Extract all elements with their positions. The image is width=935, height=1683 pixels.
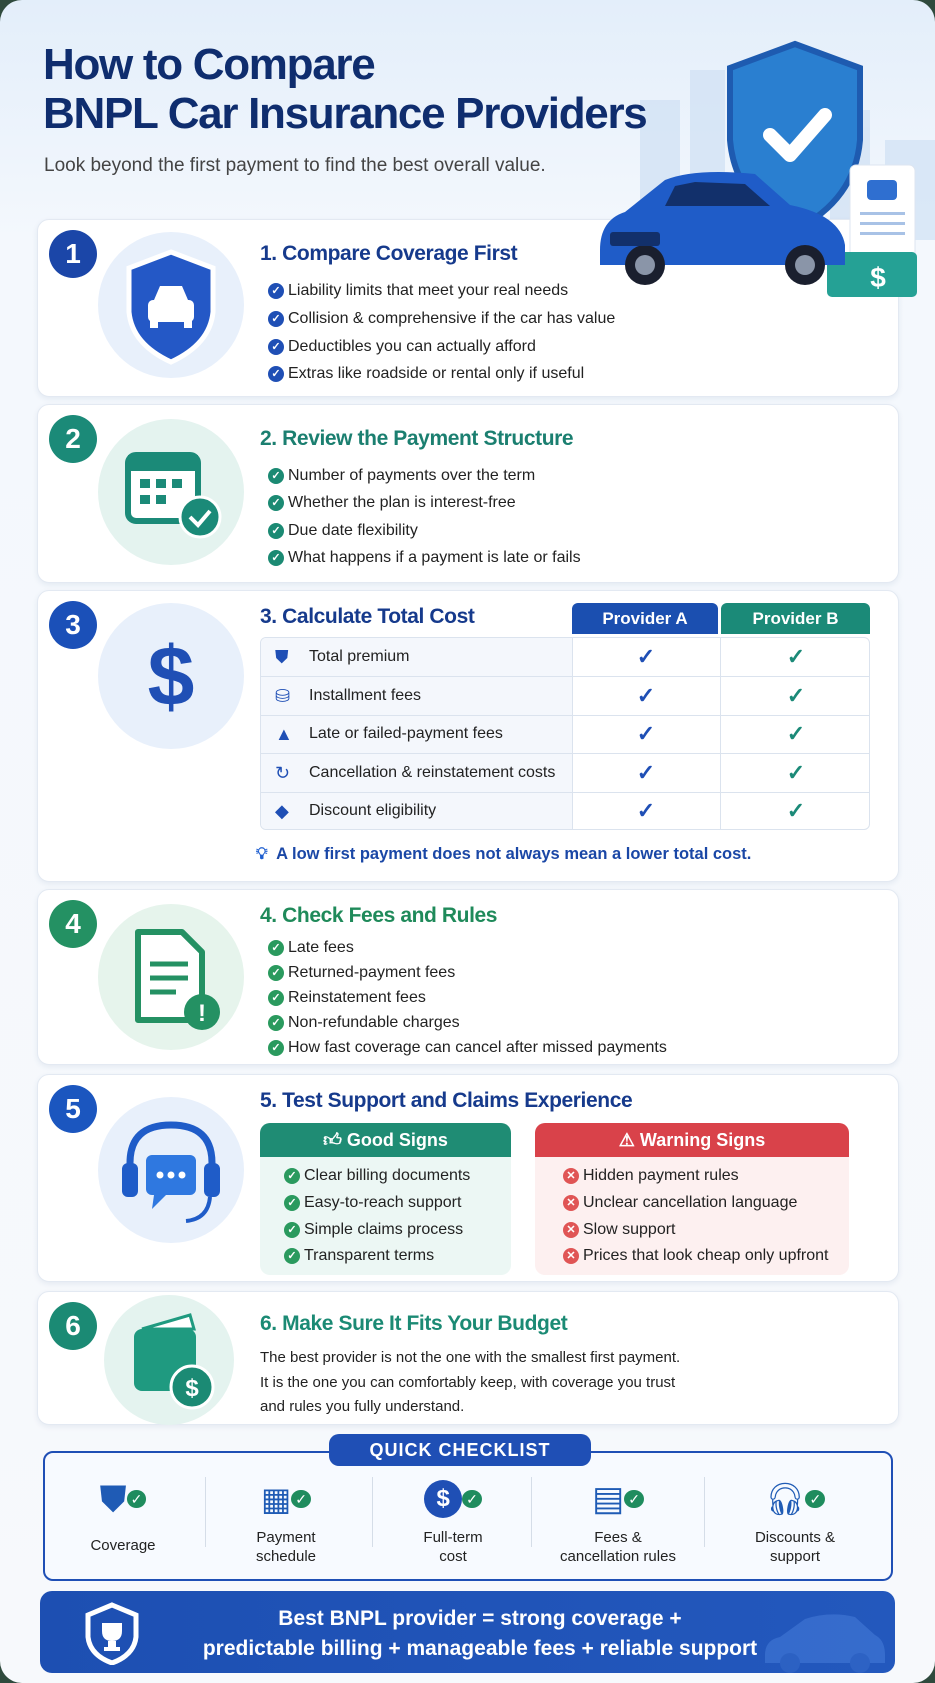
good signs panel: Clear billing documents	[304, 1167, 470, 1184]
tip: 💡︎ A low first payment does not always mean a lower total cost.	[256, 845, 751, 863]
item: full-term cost: Full-term	[423, 1529, 483, 1546]
comparison table: Total premium	[309, 648, 409, 665]
subtitle: Look beyond the first payment to find the best overall value.	[44, 155, 546, 176]
item: payment schedule: Payment	[256, 1529, 316, 1546]
heading: 3. Calculate Total Cost	[260, 605, 474, 628]
badge 3: 3	[65, 609, 81, 640]
item: payment schedule	[256, 1481, 316, 1565]
icon: headset chat	[98, 1097, 244, 1243]
badge 5	[49, 1085, 97, 1133]
bottom banner	[40, 1591, 895, 1673]
good signs panel: Simple claims process	[304, 1221, 463, 1238]
illustration: shield, car, document	[600, 40, 917, 297]
badge 2	[49, 415, 97, 463]
paragraph: The best provider is not the one with the smallest first payment.	[260, 1349, 680, 1366]
card 1: Extras like roadside or rental only if useful	[288, 365, 584, 382]
bullets	[268, 939, 667, 1056]
good signs panel: 👍︎ Good Signs	[323, 1130, 448, 1150]
warning signs panel: Unclear cancellation language	[583, 1194, 797, 1211]
bullets	[268, 467, 581, 566]
card 1	[37, 219, 899, 397]
card 4: Returned-payment fees	[288, 964, 455, 981]
item: fees: cancellation rules	[560, 1548, 676, 1565]
card 1: ✓	[271, 285, 281, 297]
card 4: ✓	[271, 992, 281, 1004]
item: coverage: ⛊ ✓	[100, 1478, 142, 1519]
comparison table: ✓	[637, 798, 655, 823]
item: discounts & support: 🎧︎ ✓	[765, 1481, 821, 1517]
heading: 1. Compare Coverage First	[260, 242, 517, 265]
card 3	[37, 590, 899, 882]
comparison table: Installment fees	[309, 687, 421, 704]
badge 5: 5	[65, 1093, 81, 1124]
comparison table: ✓	[787, 760, 805, 785]
comparison table: ◆	[275, 801, 289, 821]
comparison table	[260, 637, 870, 830]
good signs panel: ✓	[287, 1250, 297, 1262]
comparison table: ✓	[787, 644, 805, 669]
item: payment schedule: schedule	[256, 1548, 316, 1565]
icon: dollar	[98, 603, 244, 749]
icon: document alert	[98, 904, 244, 1050]
card 1: ✓	[271, 341, 281, 353]
card 5	[37, 1074, 899, 1282]
card 4: ✓	[271, 1042, 281, 1054]
comparison table: ⛊	[275, 647, 288, 667]
comparison table: Discount eligibility	[309, 802, 436, 819]
badge 3	[49, 601, 97, 649]
paragraph	[260, 1349, 680, 1415]
card 2: ✓	[271, 552, 281, 564]
badge 4	[49, 900, 97, 948]
card 1: Liability limits that meet your real needs	[288, 282, 568, 299]
card 2: Due date flexibility	[288, 522, 418, 539]
badge 6	[49, 1302, 97, 1350]
warning signs panel: ✕	[566, 1250, 576, 1262]
card 1: ✓	[271, 313, 281, 325]
background skyline	[640, 70, 935, 240]
item: discounts & support: support	[770, 1548, 820, 1565]
comparison table: ✓	[637, 683, 655, 708]
warning signs panel: ✕	[566, 1197, 576, 1209]
comparison table: ✓	[637, 721, 655, 746]
good signs panel: Transparent terms	[304, 1247, 434, 1264]
banner text: Best BNPL provider = strong coverage +	[278, 1607, 682, 1630]
comparison table: ✓	[787, 683, 805, 708]
heading: 2. Review the Payment Structure	[260, 427, 573, 450]
card 4: Non-refundable charges	[288, 1014, 460, 1031]
comparison table: ⛁	[275, 686, 290, 706]
card 1: ✓	[271, 368, 281, 380]
warning signs panel: ⚠︎ Warning Signs	[619, 1130, 765, 1150]
item: full-term cost: $	[436, 1485, 450, 1512]
banner text: predictable billing + manageable fees + reliable support	[203, 1637, 757, 1660]
title: BNPL Car Insurance Providers	[43, 89, 646, 138]
icon: shield car	[98, 232, 244, 378]
good signs panel: ✓	[287, 1197, 297, 1209]
card 2: What happens if a payment is late or fails	[288, 549, 581, 566]
warning signs panel: ✕	[566, 1170, 576, 1182]
warning signs panel	[535, 1123, 849, 1275]
card 1: Deductibles you can actually afford	[288, 338, 536, 355]
card 2: Whether the plan is interest-free	[288, 494, 516, 511]
card 2	[37, 404, 899, 583]
item: discounts & support	[755, 1481, 835, 1565]
comparison table: ✓	[787, 721, 805, 746]
item: fees: Fees &	[594, 1529, 642, 1546]
icon: trophy shield	[86, 1602, 138, 1665]
item: full-term cost: ✓	[466, 1491, 478, 1507]
paragraph: It is the one you can comfortably keep, with coverage you trust	[260, 1374, 675, 1390]
good signs panel: Easy-to-reach support	[304, 1194, 461, 1211]
card 4: ✓	[271, 967, 281, 979]
icon: dollar: $	[148, 629, 194, 723]
comparison table: ✓	[637, 760, 655, 785]
card 4: Late fees	[288, 939, 354, 956]
badge 2: 2	[65, 423, 81, 454]
card 2: ✓	[271, 497, 281, 509]
card 4	[37, 889, 899, 1065]
item: payment schedule: ▦ ✓	[261, 1481, 307, 1517]
card 6	[37, 1291, 899, 1425]
provider headers	[572, 603, 718, 634]
bullets	[268, 282, 615, 382]
illustration: shield, car, document: $	[870, 262, 886, 293]
warning signs panel: ✕	[566, 1224, 576, 1236]
comparison table: ▲	[275, 724, 293, 744]
warning signs panel: Slow support	[583, 1221, 676, 1238]
badge 4: 4	[65, 908, 81, 939]
heading: 5. Test Support and Claims Experience	[260, 1089, 632, 1112]
card 4: Reinstatement fees	[288, 989, 426, 1006]
comparison table: ✓	[637, 644, 655, 669]
badge 1: 1	[65, 238, 81, 269]
card 1: Collision & comprehensive if the car has value	[288, 310, 615, 327]
title: How to Compare	[43, 40, 374, 89]
card 4: How fast coverage can cancel after missed payments	[288, 1039, 667, 1056]
comparison table: ↻	[275, 763, 290, 783]
good signs panel: ✓	[287, 1224, 297, 1236]
good signs panel	[260, 1123, 511, 1275]
comparison table: ✓	[787, 798, 805, 823]
heading: 6. Make Sure It Fits Your Budget	[260, 1312, 567, 1335]
icon: document alert: !	[198, 1000, 206, 1027]
warning signs panel: Hidden payment rules	[583, 1167, 739, 1184]
item: coverage	[90, 1478, 156, 1554]
heading: 4. Check Fees and Rules	[260, 904, 497, 927]
checklist tab	[329, 1434, 591, 1466]
item: full-term cost: cost	[439, 1548, 467, 1565]
title	[43, 40, 646, 138]
quick checklist	[43, 1451, 893, 1581]
item: fees: ▤ ✓	[592, 1480, 640, 1518]
icon: wallet	[104, 1295, 234, 1425]
item: full-term cost	[423, 1480, 483, 1565]
good signs panel: ✓	[287, 1170, 297, 1182]
item: discounts & support: Discounts &	[755, 1529, 835, 1546]
badge 1	[49, 230, 97, 278]
comparison table: Late or failed-payment fees	[309, 725, 503, 742]
provider headers: Provider A	[602, 609, 688, 628]
card 2: ✓	[271, 525, 281, 537]
card 4: ✓	[271, 942, 281, 954]
warning signs panel: Prices that look cheap only upfront	[583, 1247, 828, 1264]
item: fees	[560, 1480, 676, 1565]
item: coverage: Coverage	[90, 1537, 156, 1554]
checklist tab: QUICK CHECKLIST	[370, 1440, 550, 1460]
comparison table: Cancellation & reinstatement costs	[309, 764, 555, 781]
paragraph: and rules you fully understand.	[260, 1398, 464, 1415]
banner text	[203, 1607, 757, 1660]
badge 6: 6	[65, 1310, 81, 1341]
icon: calendar	[98, 419, 244, 565]
card 2: ✓	[271, 470, 281, 482]
icon: car silhouette	[765, 1614, 885, 1673]
card 2: Number of payments over the term	[288, 467, 535, 484]
icon: wallet: $	[185, 1375, 199, 1402]
card 4: ✓	[271, 1017, 281, 1029]
card 3: Provider B	[752, 609, 838, 628]
